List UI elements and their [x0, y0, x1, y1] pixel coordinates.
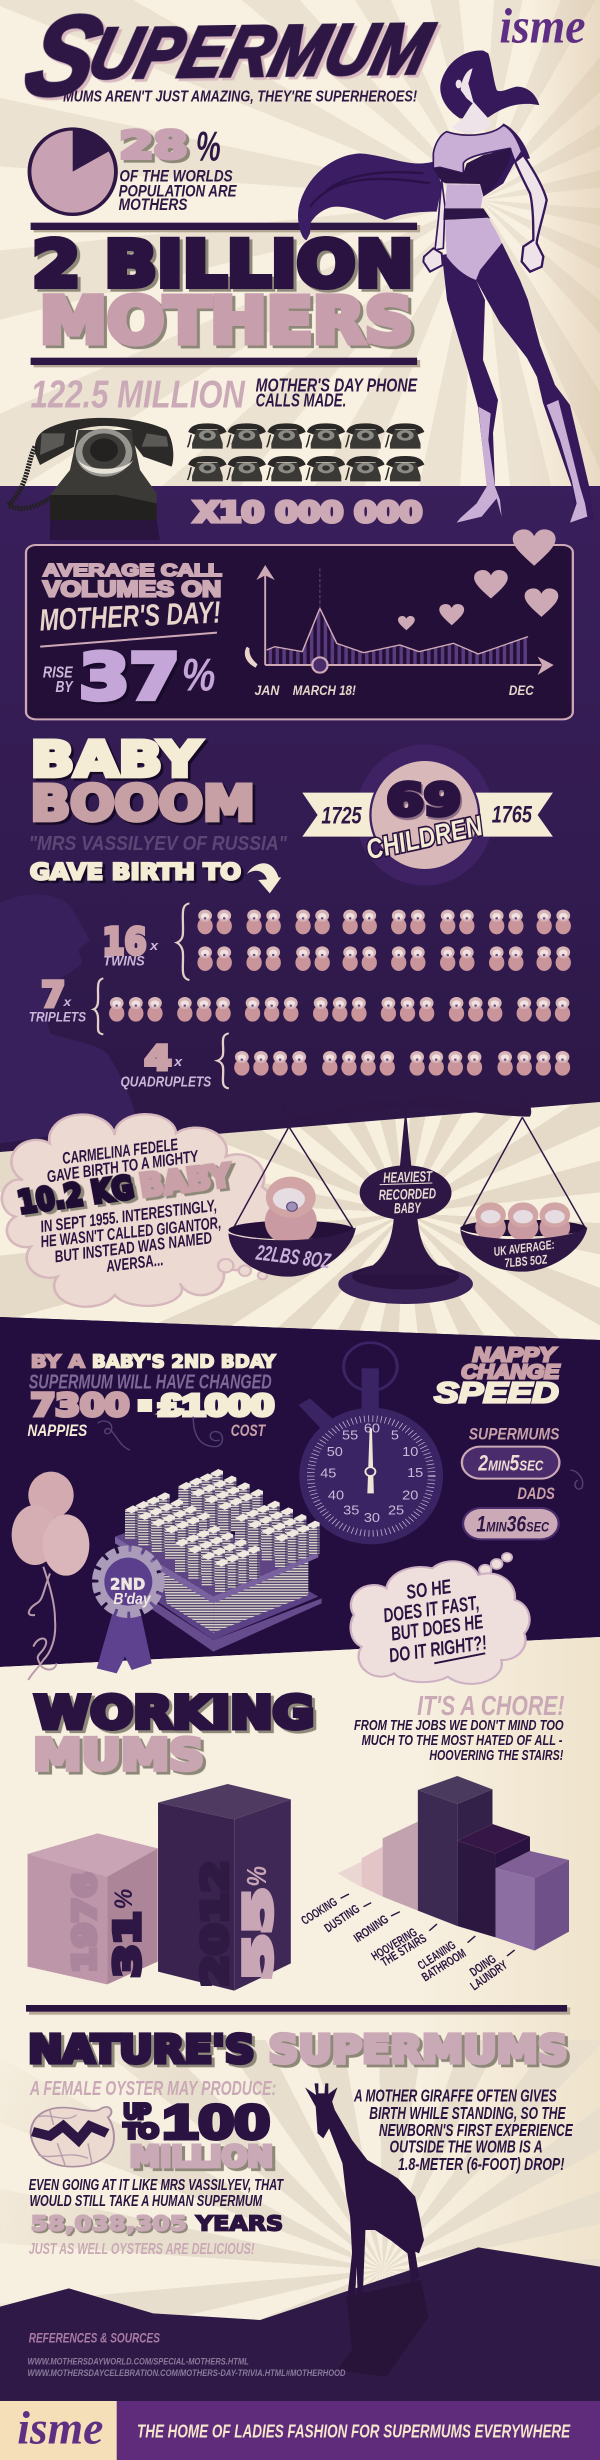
references heading: REFERENCES & SOURCES	[29, 2331, 160, 2346]
chart labels: CLEANING	[414, 1938, 459, 1972]
twins label: 16	[103, 921, 147, 963]
icons: hearts	[398, 529, 558, 630]
hill	[0, 2247, 600, 2403]
by a baby's 2nd bday	[31, 1351, 276, 1372]
title: UPERMUM	[81, 8, 441, 94]
phone calls text: MOTHER'S DAY PHONE	[256, 376, 418, 396]
scales stand	[338, 1264, 473, 1304]
delicious line: JUST AS WELL OYSTERS ARE DELICIOUS!	[29, 2241, 255, 2258]
up to 100: UP	[124, 2099, 151, 2123]
scales	[228, 1097, 587, 1304]
mrs vassilyev: "MRS VASSILYEV OF RUSSIA"	[29, 831, 287, 855]
stopwatch numbers: 35	[343, 1503, 359, 1517]
stopwatch numbers: 25	[388, 1503, 404, 1517]
arrow: curved down	[247, 863, 281, 893]
bar: 2012 55 percent: %	[242, 1866, 272, 1887]
reference urls: WWW.MOTHERSDAYWORLD.COM/SPECIAL-MOTHERS.HTML	[28, 2357, 249, 2367]
quadruplets label: x	[173, 1055, 184, 1069]
thought cloud: carmelina fedele	[2, 1114, 272, 1307]
left pan with giant baby	[228, 1177, 356, 1277]
icon: balloons	[12, 1472, 89, 1680]
chart labels: LAUNDRY	[466, 1957, 511, 1993]
icons: small phones grid	[187, 423, 424, 481]
by a baby's 2nd bday: BY A	[31, 1351, 85, 1372]
money stacks on pallets	[115, 1469, 322, 1652]
percent sign: %	[196, 123, 221, 170]
population text	[119, 167, 237, 214]
chart labels: IRONING	[350, 1912, 392, 1945]
stopwatch numbers: 45	[320, 1467, 336, 1480]
figure boots and shoes	[457, 400, 587, 523]
figure midriff	[445, 184, 483, 208]
stopwatch numbers: 40	[328, 1488, 344, 1502]
upper pallet	[115, 1520, 318, 1597]
lower tier	[160, 1563, 213, 1633]
stopwatch numbers: 30	[364, 1511, 380, 1525]
background: lower sunburst rays	[18, 2040, 576, 2320]
section: nature's supermums	[0, 2005, 600, 2460]
up to 100: 100	[162, 2095, 270, 2149]
37 percent: 37	[79, 640, 179, 714]
uk average label: UK AVERAGE:	[493, 1238, 555, 1259]
rise by: RISE	[43, 662, 73, 681]
mothers heading: MOTHERS	[40, 285, 413, 358]
cloud text: HE WASN'T CALLED GIGANTOR,	[39, 1213, 222, 1251]
rosette: 2nd birthday	[97, 1552, 158, 1673]
stopwatch numbers: 50	[327, 1445, 343, 1459]
up to 100	[124, 2095, 270, 2149]
brace: triplets	[94, 978, 103, 1034]
chart labels: THE STAIRS	[377, 1931, 430, 1969]
panel heading: AVERAGE CALL	[43, 560, 222, 581]
rosette: 2nd birthday: 2ND	[110, 1574, 145, 1593]
scales beam	[282, 1097, 531, 1122]
brace: quadruplets	[217, 1033, 229, 1088]
triplets label: TRIPLETS	[29, 1010, 86, 1025]
chart labels: DOING	[466, 1952, 499, 1979]
figure hair	[440, 51, 539, 118]
panel heading: VOLUMES ON	[43, 578, 221, 602]
years	[321, 802, 532, 829]
scales: RECORDED	[378, 1186, 436, 1204]
supermums heading: SUPERMUMS	[269, 2027, 567, 2072]
cloud text: DOES IT FAST,	[381, 1592, 481, 1627]
cloud text: BUT INSTEAD WAS NAMED	[53, 1228, 213, 1266]
quadruplets label: 4	[145, 1040, 171, 1078]
twins label: x	[149, 939, 160, 953]
background: lower cream section	[0, 1637, 600, 2260]
chart labels: BATHROOM	[418, 1946, 469, 1984]
mums heading: MUMS	[33, 1729, 204, 1780]
chart: chores isometric steps	[337, 1776, 569, 1951]
dads time pill: 1MIN36SEC	[476, 1513, 550, 1537]
twins label: TWINS	[103, 954, 145, 969]
cloud text	[39, 1135, 222, 1276]
footer bar	[0, 2401, 600, 2460]
supermums time	[462, 1424, 559, 1479]
cloud text	[381, 1575, 489, 1667]
stopwatch hand	[367, 1428, 374, 1493]
million: MILLION	[130, 2141, 273, 2174]
population text: OF THE WORLDS	[119, 167, 233, 185]
58,038,305 years: 58,038,305	[31, 2212, 187, 2236]
quadruplets label: QUADRUPLETS	[121, 1075, 212, 1090]
triplets label: 7	[41, 974, 65, 1015]
scales oval plaque	[360, 1165, 452, 1220]
chore text	[354, 1718, 564, 1764]
scales: BABY	[394, 1200, 422, 1217]
cost label: COST	[231, 1421, 267, 1440]
reference urls: WWW.MOTHERSDAYCELEBRATION.COM/MOTHERS-DAY-TRIVIA.HTML#MOTHERHOOD	[28, 2369, 346, 2379]
axis labels: MARCH 18!	[293, 683, 356, 699]
figure shorts	[445, 218, 502, 280]
icons: quadruplets babies	[234, 1051, 570, 1076]
figure bust band	[433, 148, 512, 195]
figure face and neck	[452, 68, 492, 133]
cloud text: CARMELINA FEDELE	[61, 1135, 180, 1168]
population text: POPULATION ARE	[119, 182, 237, 200]
triplets label	[29, 974, 86, 1025]
uk average label	[493, 1238, 555, 1270]
axis labels: JAN	[254, 683, 280, 699]
7300 nappies: 7300	[31, 1387, 129, 1423]
cloud text: GAVE BIRTH TO A MIGHTY	[45, 1147, 201, 1186]
bar: 2012 55 percent	[158, 1784, 291, 1991]
mother's day script: MOTHER'S DAY!	[39, 595, 222, 637]
icon: handset	[245, 647, 258, 668]
nappy change speed heading: SPEED	[434, 1378, 559, 1409]
years: 1725	[321, 803, 362, 829]
nappy change speed heading	[434, 1344, 560, 1409]
stopwatch	[298, 1343, 443, 1544]
stopwatch numbers: 20	[402, 1488, 419, 1502]
58,038,305 years: YEARS	[195, 2212, 283, 2236]
uk average label: 7LBS 5OZ	[504, 1252, 548, 1270]
x10 000 000: X10 000 000	[194, 496, 422, 529]
children: CHILDREN	[363, 811, 487, 866]
bar: 1976 31 percent: %	[111, 1889, 138, 1909]
icon: oyster	[31, 2107, 114, 2167]
scales strings	[232, 1117, 585, 1232]
2 billion heading: 2 BILLION	[32, 228, 413, 302]
right pan with three babies	[460, 1202, 587, 1272]
baby heading: BABY	[31, 732, 201, 788]
phone calls text: CALLS MADE.	[256, 391, 346, 411]
equals 1000 cost: =	[139, 1393, 151, 1419]
chart labels: DUSTING	[320, 1902, 363, 1935]
oyster comparison text: WOULD STILL TAKE A HUMAN SUPERMUM	[29, 2191, 263, 2210]
figure back cape	[480, 123, 530, 197]
chart labels: HOOVERING	[368, 1925, 420, 1963]
background: top sunburst	[0, 0, 600, 490]
supermum will have changed: SUPERMUM WILL HAVE CHANGED	[29, 1371, 272, 1393]
stopwatch numbers: 60	[364, 1422, 380, 1435]
giraffe silhouette	[305, 2083, 424, 2297]
booom heading: BOOOM	[31, 776, 255, 832]
line chart	[245, 565, 554, 699]
stopwatch numbers: 5	[391, 1428, 399, 1442]
oyster comparison text: EVEN GOING AT IT LIKE MRS VASSILYEV, THAT	[29, 2175, 284, 2194]
triplets label: x	[62, 995, 72, 1009]
phone calls text	[256, 376, 418, 411]
stopwatch numbers: 55	[342, 1428, 358, 1442]
giraffe text	[353, 2086, 573, 2174]
section: working mums	[28, 1508, 569, 1993]
69 number: 69	[386, 775, 461, 825]
figure arm right	[515, 155, 547, 272]
10.2 kg: 10.2 KG	[15, 1169, 137, 1221]
section: births and scales	[2, 974, 587, 1544]
58,038,305 years	[31, 2212, 283, 2236]
stopwatch numbers: 15	[407, 1466, 423, 1480]
baby word: BABY	[137, 1157, 235, 1204]
section: intro	[11, 0, 585, 529]
supermums time: 2MIN5SEC	[478, 1452, 544, 1476]
bar: 2012 55 percent: 55	[238, 1887, 281, 1980]
cloud text: AVERSA...	[104, 1250, 165, 1276]
reference urls	[28, 2357, 346, 2379]
section: call volumes and baby boom	[0, 529, 573, 1143]
panel heading	[43, 560, 222, 602]
supermums time: SUPERMUMS	[469, 1424, 559, 1443]
oyster comparison text	[29, 2175, 284, 2210]
icons: twins babies	[197, 910, 571, 971]
nature's heading: NATURE'S	[28, 2027, 254, 2072]
figure legs	[442, 243, 594, 520]
figure arm left	[435, 180, 445, 250]
group: balloons, money, rosette	[12, 1469, 322, 1680]
population text: MOTHERS	[119, 195, 188, 214]
figure belt	[443, 208, 490, 220]
up to 100: TO	[124, 2118, 158, 2143]
nappies label: NAPPIES	[28, 1421, 87, 1440]
rise by	[43, 662, 74, 696]
female oyster: A FEMALE OYSTER MAY PRODUCE:	[29, 2076, 276, 2100]
background: purple upper section	[0, 486, 600, 1346]
figure suit top	[433, 125, 522, 173]
subtitle: MUMS AREN'T JUST AMAZING, THEY'RE SUPERHEROES!	[63, 87, 417, 105]
figure cape	[298, 153, 442, 240]
rise by: BY	[55, 677, 74, 696]
nappy change speed heading: CHANGE	[461, 1361, 560, 1383]
badge: 69 children	[302, 744, 553, 886]
28 figure: 28	[119, 125, 187, 167]
dads time pill	[463, 1508, 559, 1539]
stopwatch numbers: 10	[402, 1445, 419, 1459]
by a baby's 2nd bday: BABY'S 2ND BDAY	[92, 1351, 276, 1372]
panel: call volumes: %	[182, 649, 215, 701]
bar: 1976 31 percent	[28, 1833, 158, 1984]
axis labels: DEC	[509, 683, 535, 699]
nappy change speed heading: NAPPY	[473, 1344, 557, 1366]
panel: call volumes	[26, 545, 573, 719]
bar: 1976 31 percent: 1976	[66, 1873, 102, 1973]
icons: triplets babies	[109, 997, 570, 1022]
bar: 1976 31 percent: 31	[107, 1911, 148, 1977]
bar: 2012 55 percent: 2012	[195, 1861, 235, 1987]
chart labels	[297, 1895, 511, 1993]
icon: large rotary phone	[8, 418, 173, 540]
cloud text: IN SEPT 1955. INTERESTINGLY,	[39, 1196, 218, 1236]
title	[11, 0, 443, 120]
background: cream scales band with rays	[0, 1102, 600, 1340]
footer logo: isme	[17, 2402, 103, 2454]
equals 1000 cost: £1000	[159, 1387, 274, 1422]
gave birth to: GAVE BIRTH TO	[30, 859, 241, 885]
122.5 million: 122.5 MILLION	[31, 372, 246, 416]
quadruplets label	[121, 1040, 212, 1090]
dads label: DADS	[517, 1484, 555, 1503]
stack clusters	[178, 1469, 263, 1536]
background: dark nappy section	[0, 1317, 600, 1667]
weight label: 22LBS 8OZ	[254, 1240, 333, 1273]
cloud text: SO HE	[404, 1575, 453, 1604]
thought cloud: does he do it right	[351, 1553, 530, 1684]
axis labels	[254, 683, 535, 699]
rosette: 2nd birthday: B'day	[113, 1591, 152, 1608]
working heading: WORKING	[34, 1687, 314, 1739]
cloud text: BUT DOES HE	[389, 1611, 485, 1645]
chart labels: COOKING	[297, 1895, 340, 1927]
pie chart 28 percent	[29, 129, 116, 214]
cloud text: DO IT RIGHT?!	[387, 1631, 489, 1667]
stopwatch numbers	[320, 1422, 423, 1525]
brace: twins	[177, 903, 189, 980]
figure: supermum superhero	[298, 51, 594, 523]
scales: HEAVIEST	[383, 1169, 433, 1186]
decorative woman silhouette	[0, 894, 138, 1143]
years: 1765	[492, 802, 532, 828]
bottom pallet	[143, 1597, 322, 1652]
